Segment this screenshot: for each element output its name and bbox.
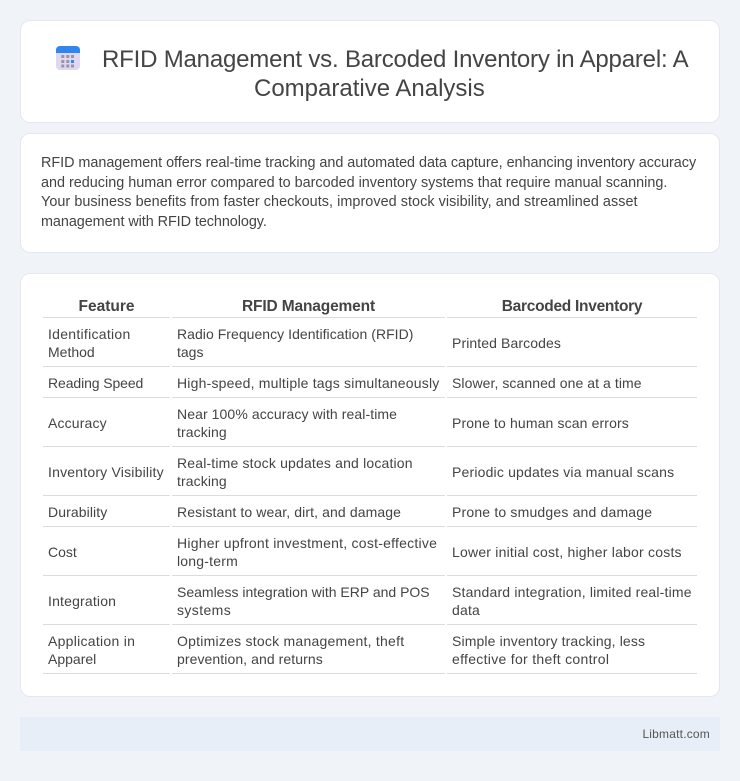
row: application in apparel: Apparel — [48, 651, 96, 667]
intro text: Your business benefits from faster checkouts, improved stock visibility, and streamlined asset — [41, 194, 638, 210]
row: reading speed: Slower, scanned one at a time — [452, 375, 642, 391]
intro card — [20, 133, 720, 253]
row: application in apparel: Optimizes stock management, theft — [177, 633, 404, 649]
row: identification method: Method — [48, 344, 95, 360]
intro text: and reducing human error compared to barcoded inventory systems that require manual scanning. — [41, 174, 667, 190]
row: integration: data — [452, 602, 480, 618]
row: application in apparel: effective for theft control — [452, 651, 609, 667]
table header: Barcoded Inventory — [502, 298, 642, 315]
row: inventory visibility: Periodic updates via manual scans — [452, 464, 674, 480]
row: accuracy: Accuracy — [48, 415, 107, 431]
row: reading speed: Reading Speed — [48, 375, 143, 391]
row: durability: Prone to smudges and damage — [452, 504, 652, 520]
row: cost: Cost — [48, 544, 77, 560]
row: cost — [48, 535, 682, 569]
row: integration — [48, 584, 692, 618]
table card — [20, 273, 720, 697]
table header: Feature — [78, 298, 134, 315]
row: identification method: Identification — [48, 326, 131, 342]
row: cost: Higher upfront investment, cost-effective — [177, 535, 437, 551]
row: integration: Standard integration, limited real-time — [452, 584, 692, 600]
icon: calendar grid — [56, 46, 80, 70]
title: RFID Management vs. Barcoded Inventory in Apparel: A — [102, 46, 688, 73]
row: reading speed — [48, 375, 642, 391]
row: accuracy: Prone to human scan errors — [452, 415, 629, 431]
row: identification method — [48, 326, 561, 360]
table header: RFID Management — [242, 298, 375, 315]
row: accuracy — [48, 406, 629, 440]
intro text: management with RFID technology. — [41, 214, 267, 230]
row: identification method: Printed Barcodes — [452, 335, 561, 351]
row: durability — [48, 504, 652, 520]
row: accuracy: tracking — [177, 424, 227, 440]
intro text — [41, 155, 696, 230]
title — [102, 46, 688, 102]
footer text: Libmatt.com — [642, 727, 710, 741]
row: cost: Lower initial cost, higher labor costs — [452, 544, 682, 560]
row: application in apparel: Application in — [48, 633, 135, 649]
row: integration: Integration — [48, 593, 116, 609]
comparison table — [43, 298, 697, 674]
row: application in apparel: Simple inventory tracking, less — [452, 633, 645, 649]
title: Comparative Analysis — [254, 75, 485, 102]
table header — [78, 298, 642, 315]
row: inventory visibility: Real-time stock updates and location — [177, 455, 413, 471]
row: accuracy: Near 100% accuracy with real-time — [177, 406, 397, 422]
row: reading speed: High-speed, multiple tags simultaneously — [177, 375, 439, 391]
header card — [20, 20, 720, 123]
row: identification method: Radio Frequency Identification (RFID) — [177, 326, 413, 342]
row: application in apparel: prevention, and returns — [177, 651, 323, 667]
row: cost: long-term — [177, 553, 238, 569]
footer bar — [20, 717, 720, 751]
row: inventory visibility: Inventory Visibility — [48, 464, 164, 480]
row: inventory visibility — [48, 455, 674, 489]
intro text: RFID management offers real-time tracking and automated data capture, enhancing inventory accuracy — [41, 155, 696, 171]
row: identification method: tags — [177, 344, 203, 360]
row: integration: Seamless integration with ERP and POS — [177, 584, 430, 600]
row: durability: Durability — [48, 504, 107, 520]
row: integration: systems — [177, 602, 231, 618]
row: application in apparel — [48, 633, 645, 667]
row: inventory visibility: tracking — [177, 473, 227, 489]
row: durability: Resistant to wear, dirt, and damage — [177, 504, 401, 520]
